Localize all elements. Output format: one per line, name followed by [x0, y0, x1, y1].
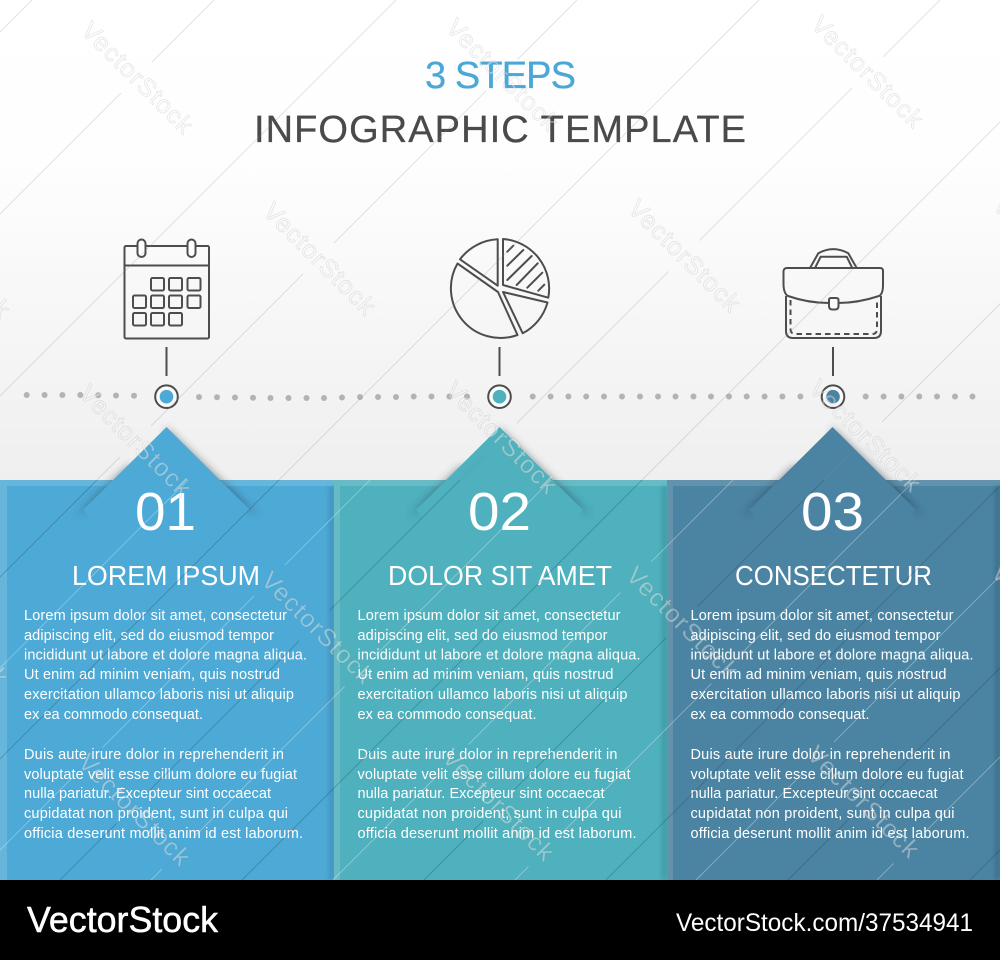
- step 1 text: exercitation ullamco laboris nisi ut aliquip: [24, 687, 294, 703]
- step 1 text: 01: [135, 482, 196, 542]
- step 2 text: adipiscing elit, sed do eiusmod tempor: [358, 628, 608, 644]
- step 2 text: [358, 482, 640, 842]
- shadow: step 2 arrow fold: [409, 427, 591, 516]
- step 3 text: incididunt ut labore et dolore magna aliqua.: [690, 648, 974, 664]
- watermark: VectorStock: [72, 748, 196, 872]
- page background: [0, 0, 1000, 480]
- panel: step 2: [334, 427, 667, 880]
- icon: pie chart: [451, 239, 549, 338]
- watermark: VectorStock: [440, 13, 564, 137]
- step 3 text: officia deserunt mollit anim id est laborum.: [690, 826, 970, 842]
- step 3 text: cupidatat non proident, sunt in culpa qui: [690, 806, 954, 822]
- watermark: VectorStock: [803, 374, 927, 498]
- step 2 text: DOLOR SIT AMET: [388, 560, 612, 591]
- footer bar: [0, 880, 1000, 960]
- footer bar: VectorStock.com/37534941: [676, 909, 973, 937]
- marker: step 2: [488, 347, 511, 408]
- icon: calendar: [124, 240, 209, 338]
- step 1 text: incididunt ut labore et dolore magna aliqua.: [24, 648, 307, 664]
- step 1 text: voluptate velit esse cillum dolore eu fugiat: [24, 767, 297, 783]
- step 1 text: ex ea commodo consequat.: [24, 707, 203, 723]
- step 3 text: Duis aute irure dolor in reprehenderit in: [690, 747, 950, 763]
- step 2 text: ex ea commodo consequat.: [358, 707, 536, 723]
- footer bar: VectorStock: [27, 899, 219, 940]
- step 2 text: Lorem ipsum dolor sit amet, consectetur: [358, 608, 621, 624]
- icon: briefcase: [784, 249, 883, 338]
- title: 3 STEPS: [425, 55, 576, 97]
- watermark: VectorStock: [75, 16, 199, 140]
- watermark: VectorStock: [805, 10, 929, 134]
- timeline dots: [24, 392, 975, 401]
- step 3 text: Ut enim ad minim veniam, quis nostrud: [690, 667, 946, 683]
- arrow: step 3: [750, 427, 916, 513]
- shadow: step 3 arrow fold: [742, 427, 924, 516]
- panel: step 3: [667, 427, 1000, 880]
- watermark: VectorStock: [257, 197, 381, 321]
- step 3 text: adipiscing elit, sed do eiusmod tempor: [690, 628, 941, 644]
- step 3 text: voluptate velit esse cillum dolore eu fugiat: [690, 767, 964, 783]
- step 2 text: Duis aute irure dolor in reprehenderit in: [358, 747, 618, 763]
- watermark: VectorStock: [255, 566, 379, 690]
- watermark: VectorStock: [622, 194, 746, 318]
- step 3 text: 03: [801, 482, 864, 542]
- step 1 text: Ut enim ad minim veniam, quis nostrud: [24, 667, 280, 683]
- step 1 text: Lorem ipsum dolor sit amet, consectetur: [24, 608, 287, 624]
- arrow: step 1: [83, 427, 250, 514]
- step 2 text: nulla pariatur. Excepteur sint occaecat: [358, 786, 604, 802]
- step 1 text: adipiscing elit, sed do eiusmod tempor: [24, 628, 274, 644]
- step 3 text: nulla pariatur. Excepteur sint occaecat: [690, 786, 938, 802]
- step 2 text: cupidatat non proident, sunt in culpa qui: [358, 806, 622, 822]
- step 1 text: nulla pariatur. Excepteur sint occaecat: [24, 786, 271, 802]
- shadow: step 1 arrow fold: [76, 427, 258, 516]
- step 2 text: officia deserunt mollit anim id est laborum.: [358, 826, 636, 842]
- step 3 text: ex ea commodo consequat.: [690, 707, 870, 723]
- step 1 text: officia deserunt mollit anim id est laborum.: [24, 826, 303, 842]
- step 1 text: [24, 482, 307, 842]
- marker: step 3: [822, 347, 844, 408]
- step 1 text: LOREM IPSUM: [72, 560, 260, 591]
- step 1 text: cupidatat non proident, sunt in culpa qui: [24, 806, 288, 822]
- step 2 text: exercitation ullamco laboris nisi ut aliquip: [358, 687, 628, 703]
- step 3 text: CONSECTETUR: [735, 560, 932, 591]
- marker: step 1: [155, 347, 178, 408]
- watermark: VectorStock: [436, 743, 560, 867]
- step 2 text: Ut enim ad minim veniam, quis nostrud: [358, 667, 614, 683]
- step 3 text: exercitation ullamco laboris nisi ut aliquip: [690, 687, 960, 703]
- panel: step 1: [0, 427, 334, 880]
- watermark: VectorStock: [801, 740, 925, 864]
- title: INFOGRAPHIC TEMPLATE: [254, 109, 746, 151]
- step 2 text: voluptate velit esse cillum dolore eu fugiat: [358, 767, 630, 783]
- watermark: VectorStock: [73, 379, 197, 503]
- step 2 text: incididunt ut labore et dolore magna aliqua.: [358, 648, 640, 664]
- step 3 text: [690, 482, 974, 842]
- title: [254, 55, 746, 151]
- step 3 text: Lorem ipsum dolor sit amet, consectetur: [690, 608, 954, 624]
- step 1 text: Duis aute irure dolor in reprehenderit in: [24, 747, 284, 763]
- watermark: VectorStock: [620, 561, 744, 685]
- arrow: step 2: [416, 427, 582, 514]
- step 2 text: 02: [468, 482, 531, 542]
- watermark: VectorStock: [439, 376, 563, 500]
